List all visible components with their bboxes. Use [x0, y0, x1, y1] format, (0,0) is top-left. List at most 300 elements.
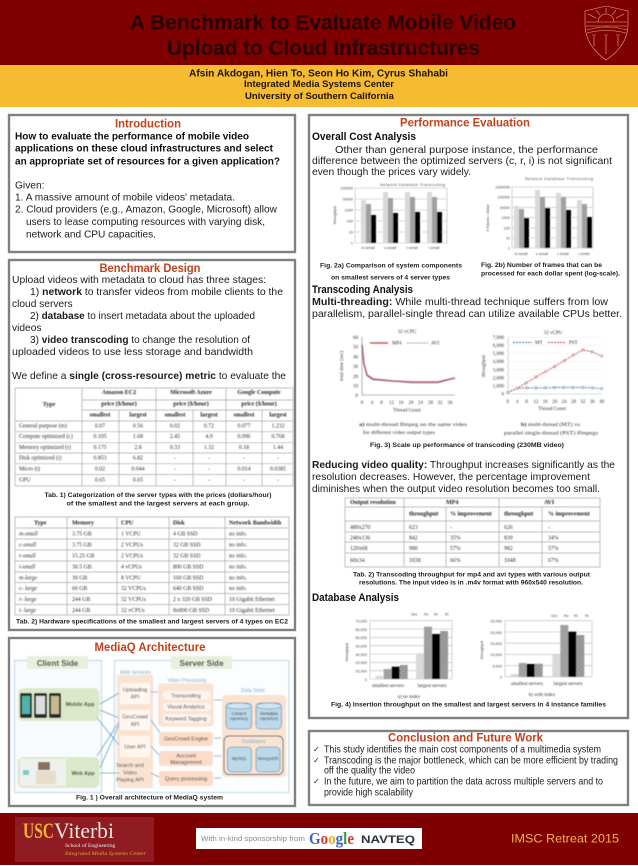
table: hardware specifications: r-small [19, 554, 36, 560]
text: research question [15, 132, 280, 168]
list: conclusions: ✓ [313, 745, 320, 754]
table: server types and prices: - [208, 466, 210, 472]
web services column: Web Services [120, 670, 151, 676]
table: server types and prices: 0.72 [204, 424, 214, 430]
chart: fig 2b frames per dollar [486, 177, 593, 256]
chart: fig 3a total time vs thread count: 10 [353, 384, 358, 390]
chart: fig 2b frames per dollar: 100000 [497, 196, 510, 200]
title [130, 12, 516, 60]
table: server types and prices: - [277, 478, 279, 484]
table: hardware specifications: r- large [19, 597, 37, 603]
table: hardware specifications: no info. [229, 585, 248, 592]
table: hardware specifications: 32 GB SSD [173, 542, 200, 548]
chart: fig 2b frames per dollar: i-small [579, 252, 590, 256]
table: server types and prices: price ($/hour) [101, 400, 137, 408]
panel: benchmark design [9, 260, 295, 630]
chart: fig 3a total time vs thread count: 0 [361, 401, 364, 406]
chart: fig 4b with index: smallest servers [511, 682, 543, 687]
chart: fig 3a total time vs thread count: 24 [418, 401, 424, 406]
table: hardware specifications: i- large [19, 608, 36, 614]
chart: fig 3a total time vs thread count: 4 [371, 401, 374, 406]
list: conclusions: ✓ [313, 777, 320, 786]
list: conclusions: This study identifies the main cost components of a multimedia system [324, 744, 601, 756]
client: web app [18, 757, 100, 788]
table: server types and prices: 0.02 [170, 424, 180, 430]
chart: fig 2a throughput: 100000 [340, 186, 353, 190]
table: server types and prices: 0.33 [170, 445, 180, 451]
chart: fig 2a throughput: 1 [351, 242, 353, 246]
text: overall cost: even though the prices vary widely. [312, 167, 471, 178]
chart: fig 3b throughput vs thread count: b) multi-thread (MT) vs. [521, 423, 581, 428]
header banner [0, 0, 638, 65]
chart: fig 3a total time vs thread count [340, 330, 468, 436]
chart: fig 4b with index: 20,000 [490, 631, 502, 635]
chart: fig 3b throughput vs thread count: 4,000 [493, 360, 504, 365]
table: server types and prices: smallest [90, 412, 110, 418]
text: overall cost: difference between the optimized servers (c, r, i) is not significant [312, 156, 612, 167]
table: hardware specifications: 244 GB [72, 608, 90, 614]
table: transcoding throughput: 980 [409, 546, 418, 552]
table: server types and prices: 1.44 [273, 445, 283, 451]
table: hardware specifications: no info. [229, 552, 248, 560]
table: server types and prices: price ($/hour) [173, 400, 209, 408]
chart: fig 4a no index: 70,000 [355, 620, 367, 624]
chart: fig 3a total time vs thread count: Thread Count [393, 408, 421, 414]
web services column: GeoCrowd [122, 714, 148, 720]
table: server types and prices: 0.65 [95, 478, 105, 484]
table: server types and prices: 0.853 [93, 456, 107, 462]
chart: fig 4b with index: Rr [574, 614, 579, 618]
table: server types and prices: 6.82 [133, 456, 143, 462]
web services column: API [131, 722, 139, 728]
table: server types and prices: smallest [165, 412, 185, 418]
video processing group: Video Processing [168, 678, 207, 684]
table: server types and prices: Compute optimized (c) [19, 433, 73, 440]
chart: fig 4b with index: largest servers [554, 682, 582, 687]
chart: fig 4a no index [345, 612, 452, 700]
text: multi-threading [312, 297, 622, 320]
chart: fig 4b with index: b) with index [529, 693, 556, 698]
text: three stages: 3) video transcoding to change the resolution of [30, 335, 250, 346]
sponsors strip: With in-kind sponsorship from [201, 836, 305, 843]
table: server types and prices: - [243, 456, 245, 462]
table: server types and prices: 2.45 [170, 434, 180, 440]
chart: fig 2b frames per dollar: m-small [514, 252, 528, 256]
subheading: database analysis: Database Analysis [312, 592, 399, 604]
chart: fig 4b with index: Gm [551, 614, 557, 618]
chart: fig 4a no index: a) no index [398, 695, 421, 700]
table: transcoding throughput: 480x270 [350, 525, 370, 531]
table: server types and prices: 1.232 [271, 424, 285, 430]
text: multi-threading: Multi-threading: While multi-thread technique suffers from low [312, 297, 609, 308]
data store: Data Store [241, 688, 265, 694]
video processing group: Keyword Tagging [165, 716, 207, 722]
chart: fig 4b with index: 25,000 [490, 620, 502, 624]
text: overall cost [312, 145, 612, 178]
chart: fig 3b throughput vs thread count: 16 [543, 400, 548, 405]
chart: fig 4b with index: 15,000 [490, 642, 502, 646]
text: given: users to lease computing resources with varying disk, [26, 217, 265, 228]
text: reducing video quality: Reducing video quality: Throughput increases significantly as the [312, 460, 615, 471]
chart: fig 3b throughput vs thread count: 0 [506, 400, 509, 405]
table: transcoding throughput [345, 498, 600, 567]
table: transcoding throughput: 66% [450, 558, 461, 564]
table: transcoding throughput: 67% [548, 558, 559, 564]
table: hardware specifications: i-small [19, 564, 35, 570]
chart: fig 4b with index: 5,000 [492, 664, 502, 668]
chart: fig 3b throughput vs thread count: 32 [580, 400, 586, 405]
web services column: User API [124, 744, 146, 750]
text: given [15, 180, 278, 240]
chart: fig 2a throughput: 10000 [342, 198, 353, 202]
chart: fig 3b throughput vs thread count: 4 [516, 400, 519, 405]
chart: fig 4b with index [480, 614, 592, 698]
text: given: 2. Cloud providers (e.g., Amazon, Google, Microsoft) allow [15, 204, 278, 216]
chart: fig 4a no index: 60,000 [355, 628, 367, 632]
table: server types and prices: 1.32 [204, 445, 214, 451]
chart: fig 4a no index: 30,000 [355, 653, 367, 657]
table: server types and prices: Google Compute [237, 390, 281, 396]
table: hardware specifications: 32 VCPUs [121, 586, 147, 592]
video processing group: Visual Analytics [167, 704, 205, 710]
chart: fig 4a no index: largest servers [418, 684, 446, 689]
table: server types and prices: Disk optimized (i) [19, 454, 62, 462]
chart: fig 3b throughput vs thread count: MT [535, 341, 542, 346]
chart: fig 3a total time vs thread count: 8 [380, 401, 383, 406]
sponsors strip [196, 828, 422, 849]
text: given: network and CPU capacities. [26, 230, 156, 240]
label: client side: Client Side [37, 659, 79, 668]
table: hardware specifications: 32 vCPUs [121, 608, 145, 614]
chart: fig 2a throughput: 100 [347, 220, 353, 224]
table: server types and prices: smallest [234, 412, 254, 418]
table: server types and prices: largest [129, 412, 147, 418]
text: given: Given: [15, 180, 44, 192]
table: transcoding throughput: 35% [450, 536, 461, 542]
table: server types and prices: 0.014 [237, 466, 251, 472]
chart: fig 4b with index: throughput [480, 640, 484, 659]
web services column: API [131, 694, 139, 700]
text: three stages: cloud servers [12, 299, 73, 310]
chart: fig 4a no index: smallest servers [372, 684, 404, 689]
table: hardware specifications: Network Bandwidth [229, 520, 282, 526]
table: server types and prices: Microsoft Azure [170, 390, 212, 396]
chart: fig 2b frames per dollar: 1 [508, 246, 510, 250]
chart: fig 2b frames per dollar: Network Database Transcoding [525, 177, 593, 181]
data store: Databases [242, 739, 266, 745]
text: reducing video quality: resolution decreases. However, the percentage improvement [312, 472, 590, 483]
caption: figure 3: Fig. 3) Scale up performance of transcoding (230MB video) [370, 442, 564, 449]
table: hardware specifications: 4 vCPUs [121, 564, 143, 570]
table: server types and prices: 0.0385 [270, 466, 286, 472]
chart: fig 3b throughput vs thread count: 6,000 [493, 344, 504, 349]
title: A Benchmark to Evaluate Mobile Video [130, 12, 516, 34]
table: hardware specifications: 32 VCPUs [121, 597, 147, 603]
table: transcoding throughput: 240x136 [350, 536, 370, 542]
chart: fig 4a no index: 10,000 [355, 670, 367, 674]
table: hardware specifications: 2 VCPUs [121, 554, 144, 560]
table: hardware specifications: no info. [229, 530, 248, 538]
caption: table 2 transcoding: resolutions. The input video is in .m4v format with 960x540 resolution. [359, 580, 583, 586]
table: server types and prices: General purpose (m) [19, 422, 67, 430]
table: hardware specifications: Memory [72, 520, 94, 526]
chart: fig 4b with index: Ri [585, 614, 589, 618]
table: server types and prices: 0.044 [131, 466, 145, 472]
text: three stages: We define a single (cross-resource) metric to evaluate the [12, 371, 286, 382]
list: conclusions: In the future, we aim to partition the data across multiple servers and to [324, 776, 603, 788]
chart: fig 3a total time vs thread count: 32 vCPU [398, 330, 417, 335]
chart: fig 2a throughput: m-small [361, 246, 375, 250]
table: hardware specifications: Type [34, 520, 47, 526]
table: hardware specifications: CPU [121, 520, 134, 526]
text: three stages: videos [12, 323, 41, 334]
chart: fig 2b frames per dollar: 100 [504, 226, 510, 230]
table: server types and prices: 0.56 [133, 424, 143, 430]
chart: fig 3a total time vs thread count: AVI [431, 342, 440, 346]
table: server types and prices: Micro (t) [19, 466, 40, 472]
table: server types and prices: price ($/hour) [241, 400, 277, 408]
table: hardware specifications: 15.25 GB [72, 554, 95, 560]
list: conclusions [313, 744, 618, 798]
client: mobile app [18, 688, 100, 721]
chart: fig 3b throughput vs thread count: 28 [571, 400, 576, 405]
panel: performance evaluation [309, 115, 628, 718]
engine boxes [159, 732, 213, 786]
text: three stages [12, 275, 286, 382]
logo: Google: Google [309, 829, 354, 848]
heading: MediaQ architecture: MediaQ Architecture [94, 642, 206, 654]
chart: fig 3b throughput vs thread count [482, 331, 605, 436]
text: reducing video quality [312, 460, 615, 495]
table: hardware specifications: 10 Gigabit Ethernet [229, 608, 275, 614]
chart: fig 4a no index: Rc [424, 612, 429, 616]
text: three stages: 1) network to transfer videos from mobile clients to the [30, 287, 283, 298]
table: transcoding throughput: 626 [504, 525, 513, 531]
chart: fig 3b throughput vs thread count: 12 [533, 400, 539, 405]
chart: fig 3a total time vs thread count: total time (sec) [340, 351, 345, 381]
table: hardware specifications: no info. [229, 564, 248, 570]
data store: repository [230, 716, 249, 721]
text: reducing video quality: diminishes when the output video resolution becomes too small. [312, 484, 600, 495]
caption: figure 2b: processed for each dollar spent (log-scale). [481, 270, 620, 278]
chart: fig 2b frames per dollar: 10 [506, 236, 510, 240]
table: hardware specifications [15, 517, 289, 615]
authors band: Afsin Akdogan, Hien To, Seon Ho Kim, Cyrus Shahabi [189, 68, 448, 80]
text: research question: an appropriate set of resources for a given application? [15, 156, 280, 168]
table: transcoding throughput: 34% [548, 536, 559, 542]
icon: USC seal [585, 6, 628, 60]
label: server side [171, 656, 232, 669]
chart: fig 3a total time vs thread count: 30 [353, 365, 358, 370]
chart: fig 3a total time vs thread count: 12 [389, 401, 394, 406]
table: server types and prices: - [174, 478, 176, 484]
table: hardware specifications: 2 VCPUs [121, 542, 144, 548]
logo: NAVTEQ: NAVTEQ [361, 834, 416, 846]
text: overall cost: Other than general purpose instance, the performance [335, 145, 598, 156]
heading: conclusion: Conclusion and Future Work [388, 732, 544, 744]
text: three stages: uploaded videos to use less storage and bandwidth [12, 347, 253, 358]
caption: figure 2b [481, 262, 620, 278]
table: transcoding throughput: 623 [409, 525, 418, 531]
table: transcoding throughput: throughput [409, 512, 438, 518]
table: server types and prices: 0.175 [93, 445, 107, 451]
chart: fig 3a total time vs thread count: for different video output types [363, 431, 435, 436]
table: hardware specifications: 30.5 GB [72, 564, 92, 570]
chart: fig 4b with index: 10,000 [490, 653, 502, 657]
caption: table 1 [44, 492, 272, 508]
chart: fig 3b throughput vs thread count: PST [569, 341, 578, 346]
table: transcoding throughput: 60x34 [350, 558, 365, 564]
table: server types and prices: largest [200, 412, 218, 418]
chart: fig 3b throughput vs thread count: 36 [590, 400, 595, 405]
table: transcoding throughput: 120x68 [350, 546, 367, 552]
chart: fig 4b with index: 0 [500, 676, 502, 680]
chart: fig 4a no index: Gm [411, 612, 417, 616]
logo: USC Viterbi: USC [23, 818, 54, 843]
chart: fig 3a total time vs thread count: 0 [356, 394, 358, 399]
table: transcoding throughput: - [548, 525, 550, 531]
text: given: 1. A massive amount of mobile videos' metadata. [15, 192, 235, 204]
engine boxes: GeoCrowd Engine [164, 736, 208, 742]
chart: fig 3b throughput vs thread count: 3,000 [493, 368, 504, 374]
text: research question: How to evaluate the performance of mobile video [15, 132, 249, 142]
chart: fig 3b throughput vs thread count: 20 [552, 400, 558, 405]
chart: fig 3b throughput vs thread count: 7,000 [493, 336, 504, 341]
chart: fig 3a total time vs thread count: 60 [353, 336, 358, 341]
table: server types and prices: 0.07 [95, 424, 105, 430]
label: client side [27, 656, 88, 669]
panel: MediaQ architecture [9, 638, 295, 806]
chart: fig 4a no index: 20,000 [355, 661, 367, 665]
table: server types and prices: GPU [19, 478, 31, 484]
chart: fig 4a no index: Rr [434, 612, 439, 616]
chart: fig 3a total time vs thread count: 16 [398, 401, 404, 406]
list: conclusions: provide high scalability [324, 788, 414, 798]
data store: Metadata [260, 711, 278, 716]
table: transcoding throughput: - [450, 525, 452, 531]
table: hardware specifications: 10 Gigabit Ethernet [229, 597, 275, 603]
chart: fig 2a throughput: i-small [429, 246, 440, 250]
table: server types and prices: - [208, 478, 210, 484]
client: mobile app: Mobile App [66, 702, 95, 708]
footer banner [0, 813, 638, 865]
logo: USC Viterbi: Integrated Media Systems Center [64, 851, 147, 857]
table: hardware specifications: no info. [229, 542, 248, 548]
table: hardware specifications: m-large [19, 576, 38, 582]
chart: fig 3a total time vs thread count: 20 [353, 375, 358, 380]
table: server types and prices: largest [269, 412, 287, 418]
chart: fig 3b throughput vs thread count: 2,000 [493, 376, 504, 382]
list: conclusions: ✓ [313, 756, 320, 765]
table: server types and prices: 0.077 [237, 424, 251, 430]
chart: fig 4a no index: Ri [445, 612, 449, 616]
caption: table 1: of the smallest and the largest servers at each group. [66, 500, 250, 508]
table: server types and prices: - [243, 478, 245, 484]
panel: conclusion and future work [309, 731, 628, 805]
text: multi-threading: parallelism, parallel-single thread can utilize available CPUs better. [312, 309, 622, 320]
caption: figure 2b: Fig. 2b) Number of frames that can be [481, 262, 602, 269]
table: hardware specifications: 60 GB [72, 586, 87, 592]
table: server types and prices: 0.18 [239, 445, 249, 451]
chart: fig 2b frames per dollar: 1000000 [495, 186, 510, 190]
chart: fig 4a no index: 50,000 [355, 636, 367, 640]
table: hardware specifications: 8 VCPU [121, 576, 142, 582]
heading: introduction: Introduction [115, 118, 181, 130]
table: hardware specifications: 800 GB SSD [173, 564, 203, 570]
web services column: Video [123, 770, 137, 776]
chart: fig 3a total time vs thread count: MP4 [392, 342, 402, 346]
table: server types and prices: 0.096 [237, 434, 251, 440]
table: hardware specifications: c- large [19, 586, 37, 592]
client: web app: Web App [71, 771, 95, 777]
table: transcoding throughput: AVI [544, 500, 555, 506]
chart: fig 2a throughput [333, 183, 447, 250]
authors band: Integrated Media Systems Center [244, 79, 395, 89]
video processing group: Transcoding [171, 694, 201, 700]
chart: fig 3a total time vs thread count: 32 [438, 401, 443, 406]
chart: fig 4b with index: Rc [564, 614, 569, 618]
engine boxes: Management [170, 760, 202, 766]
data store [222, 688, 286, 777]
chart: fig 2b frames per dollar: 1000 [502, 216, 510, 220]
table: transcoding throughput: throughput [504, 512, 533, 518]
heading: benchmark design: Benchmark Design [100, 263, 200, 275]
diagram: architecture of MediaQ [14, 656, 289, 792]
engine boxes: Query processing [165, 776, 207, 782]
table: hardware specifications: 244 GB [72, 597, 90, 603]
chart: fig 3b throughput vs thread count: parallel single-thread (PST) ffmpegs [504, 432, 598, 436]
data store: MySQL [232, 756, 248, 761]
chart: fig 3a total time vs thread count: 28 [428, 401, 434, 406]
chart: fig 2a throughput: c-small [384, 246, 396, 250]
table: hardware specifications: 4 GB SSD [173, 532, 197, 538]
table: hardware specifications: m-small [19, 532, 38, 538]
caption: table 2 transcoding: Tab. 2) Transcoding throughput for mp4 and avi types with various output [353, 572, 591, 578]
caption: table 2 transcoding [353, 572, 591, 586]
chart: fig 2b frames per dollar: 10000 [499, 206, 510, 210]
table: hardware specifications: 3.75 GB [72, 532, 92, 538]
table: transcoding throughput: 842 [409, 536, 418, 542]
caption: table 1: Tab. 1) Categorization of the server types with the prices (dollars/hour) [44, 492, 272, 499]
label: server side: Server Side [179, 659, 224, 668]
chart: fig 2a throughput: r-small [406, 246, 418, 250]
table: server types and prices: - [208, 456, 210, 462]
chart: fig 2a throughput: throughput [333, 205, 337, 224]
panel: introduction [9, 115, 295, 252]
chart: fig 3b throughput vs thread count: 1,000 [493, 384, 504, 390]
text: IMSC Retreat 2015: IMSC Retreat 2015 [511, 832, 619, 846]
table: hardware specifications: 160 GB SSD [173, 576, 203, 582]
video processing group [158, 678, 214, 726]
engine boxes: Account [176, 754, 196, 760]
data store: MongoDB [258, 756, 278, 761]
table: transcoding throughput: MP4 [446, 500, 458, 506]
heading: performance evaluation: Performance Evaluation [400, 118, 530, 130]
chart: fig 4a no index: throughput [345, 642, 349, 661]
chart: fig 3b throughput vs thread count: 40 [599, 400, 605, 405]
table: server types and prices: Amazon EC2 [102, 390, 136, 396]
chart: fig 2a throughput: Network Database Transcoding [380, 183, 445, 187]
chart: fig 3b throughput vs thread count: 0 [502, 392, 504, 398]
caption: figure 2a: Fig. 2a) Comparison of system components [320, 262, 462, 270]
table: server types and prices: 4.9 [205, 434, 213, 440]
table: hardware specifications: 2 x 320 GB SSD [173, 597, 212, 603]
table: server types and prices: 0.105 [93, 434, 107, 440]
table: server types and prices: 2.8 [134, 445, 142, 451]
chart: fig 2a throughput: 1000 [345, 208, 353, 212]
chart: fig 2a throughput: 10 [349, 230, 353, 234]
table: hardware specifications: c-small [19, 542, 36, 548]
